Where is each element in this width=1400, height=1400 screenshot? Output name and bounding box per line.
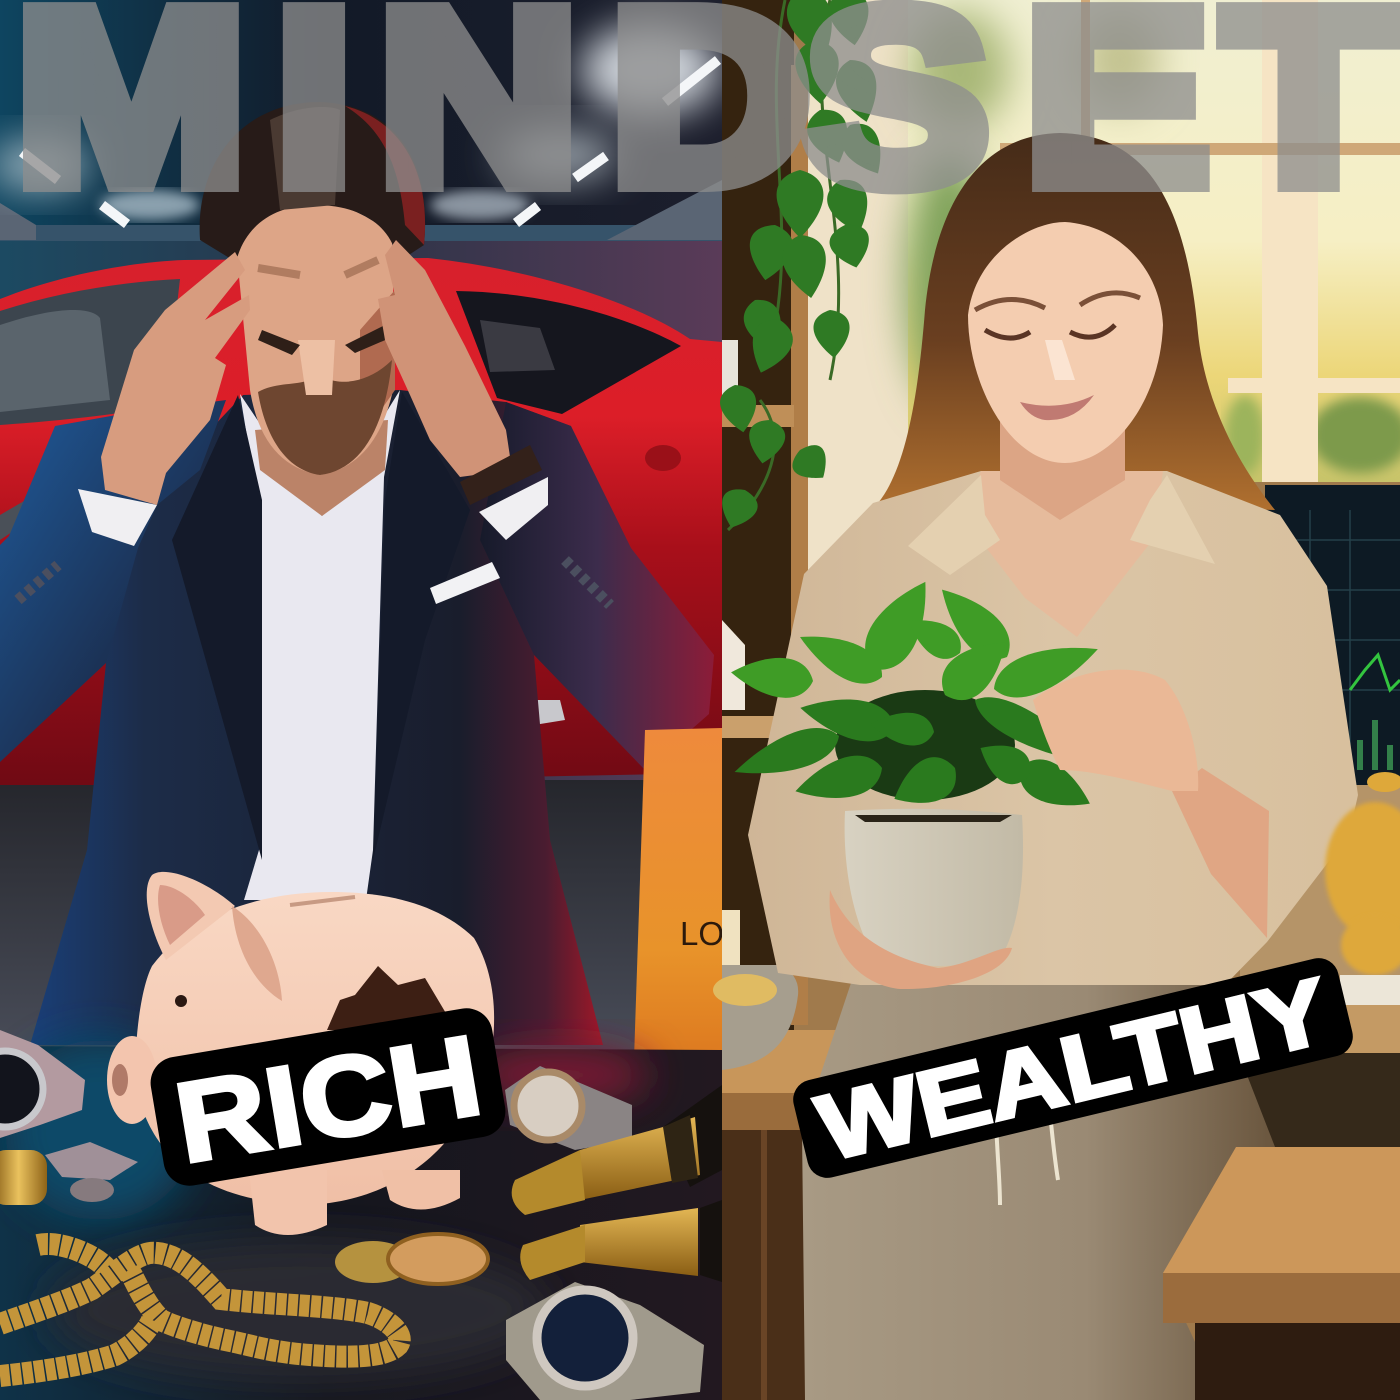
chest skin [964, 471, 1163, 637]
suit body [30, 390, 603, 1045]
man [0, 102, 714, 1045]
window [905, 0, 1400, 482]
woman [729, 133, 1358, 1400]
orange shopping bag: LO [680, 915, 724, 952]
pot [845, 809, 1023, 966]
lapels [172, 392, 470, 860]
watch bottom [506, 1282, 704, 1400]
room background [722, 0, 1400, 1400]
wooden table [1163, 1147, 1400, 1400]
lower leaves [729, 686, 1103, 821]
label: RICH: RICH [167, 1012, 490, 1186]
label: WEALTHY: WEALTHY [809, 960, 1338, 1180]
body [135, 892, 494, 1205]
white shirt [240, 390, 400, 900]
trading monitor [1265, 485, 1400, 785]
bowl with candle [713, 910, 798, 1070]
gold chain [0, 1244, 400, 1376]
hair [878, 133, 1275, 510]
luxury items [0, 1030, 722, 1400]
left sleeve [0, 400, 226, 762]
gold coin plant [1325, 772, 1400, 1005]
potted plant [729, 570, 1105, 966]
watch left [0, 1030, 85, 1138]
right hand [378, 240, 512, 477]
garage background [0, 0, 722, 1060]
watch centre [505, 1066, 632, 1150]
neck and collar [255, 420, 388, 516]
orange shopping bag [633, 728, 724, 1098]
right cuff [479, 477, 548, 540]
hair [200, 102, 425, 262]
coins [335, 1234, 488, 1284]
collar [908, 475, 1215, 575]
right sleeve [480, 402, 714, 770]
wrist watch [460, 445, 542, 505]
ear right [232, 906, 282, 1001]
hanging vines [714, 0, 894, 534]
hand on leaf [1033, 670, 1198, 791]
ring and small jewels [0, 1142, 138, 1205]
snout [107, 1036, 157, 1124]
table [0, 1040, 722, 1400]
neck and face [1000, 410, 1125, 520]
shirt [748, 471, 1358, 985]
trousers [802, 980, 1275, 1400]
champagne bottles [512, 1085, 722, 1282]
red sports car [0, 258, 722, 785]
panel: rich [0, 0, 724, 1400]
crack [327, 966, 447, 1030]
foliage shadow [835, 690, 1015, 800]
panel: wealthy [713, 0, 1400, 1400]
forearm [1172, 768, 1269, 938]
counter and cabinet [722, 1005, 1400, 1400]
face [235, 202, 395, 475]
leaves [729, 570, 1105, 711]
legs [249, 1170, 327, 1235]
sleeve buttons [18, 560, 610, 605]
ear left [147, 872, 235, 960]
pocket square [430, 562, 500, 604]
left cuff [78, 489, 157, 546]
shelf [722, 65, 808, 1025]
left hand [101, 252, 250, 505]
broken piggy bank [107, 872, 494, 1235]
hand under pot [830, 890, 1012, 989]
